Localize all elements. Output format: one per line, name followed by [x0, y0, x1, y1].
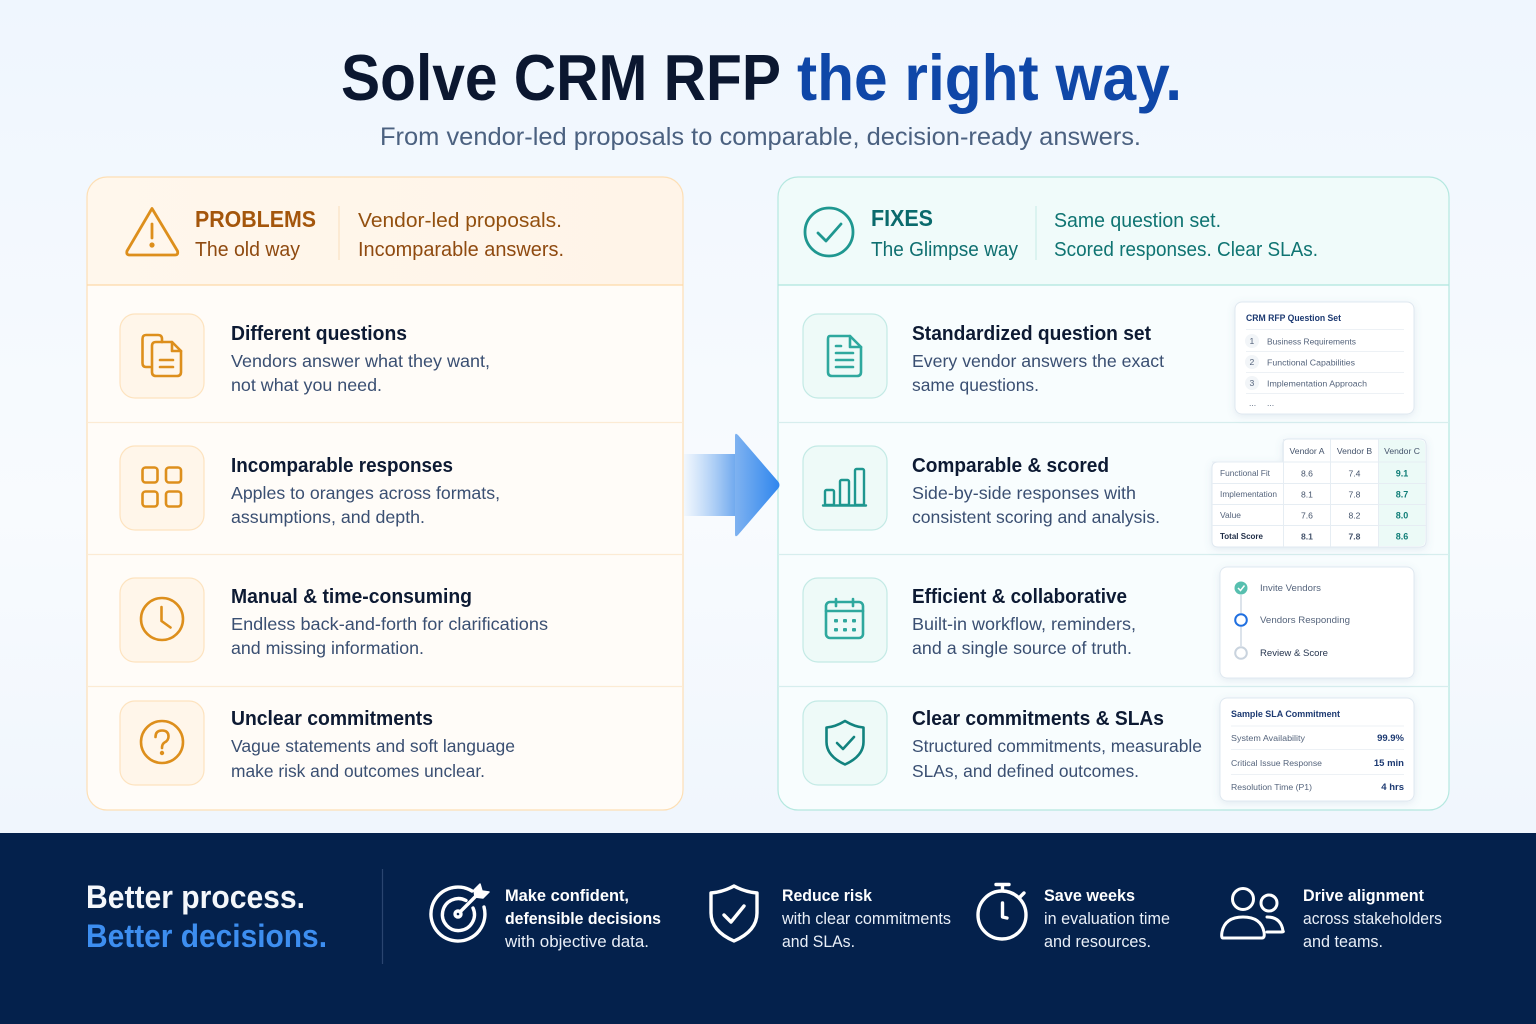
benefit: reduce risk: with clear commitments	[781, 909, 951, 928]
card: SLA commitment	[1220, 698, 1414, 801]
row: efficient and collaborative	[803, 578, 1136, 662]
fixes summary: Scored responses. Clear SLAs.	[1054, 238, 1318, 261]
card: workflow status	[1220, 567, 1414, 678]
benefit: save weeks: and resources.	[1044, 932, 1151, 951]
row: comparable and scored: Side-by-side responses with	[912, 483, 1136, 503]
card: vendor score table: 8.0	[1396, 510, 1408, 520]
card: question set: CRM RFP Question Set	[1246, 313, 1341, 323]
subtitle: From vendor-led proposals to comparable, decision-ready answers.	[380, 123, 1141, 151]
card: vendor score table: Functional Fit	[1220, 468, 1271, 478]
card: SLA commitment: Sample SLA Commitment	[1231, 709, 1340, 719]
card: vendor score table: Implementation	[1220, 489, 1277, 499]
problems summary	[358, 209, 564, 261]
row: incomparable responses: Apples to oranges across formats,	[231, 483, 500, 503]
card: vendor score table: Total Score	[1220, 531, 1263, 541]
card: question set: Business Requirements	[1267, 336, 1356, 346]
card: question set: Implementation Approach	[1267, 378, 1367, 388]
row: different questions: Different questions	[231, 323, 407, 345]
row: different questions	[120, 314, 490, 398]
card: SLA commitment: 15 min	[1374, 758, 1404, 769]
benefit: save weeks: Save weeks	[1044, 886, 1135, 905]
row: comparable and scored	[803, 446, 1160, 530]
benefit: drive alignment: and teams.	[1303, 932, 1383, 951]
problems label: The old way	[195, 239, 300, 261]
card: vendor score table: 8.6	[1301, 468, 1313, 478]
card: vendor score table: 8.1	[1301, 490, 1313, 500]
icon: calendar	[803, 578, 887, 662]
row: manual and time-consuming: Endless back-and-forth for clarifications	[231, 614, 548, 634]
card: vendor score table: Value	[1220, 510, 1241, 520]
footer band	[0, 833, 1536, 1024]
problems summary: Vendor-led proposals.	[358, 209, 562, 232]
card: SLA commitment: 4 hrs	[1381, 782, 1404, 793]
row: manual and time-consuming: Manual & time-consuming	[231, 586, 472, 608]
problems label: PROBLEMS	[195, 206, 316, 232]
row: different questions: Vendors answer what they want,	[231, 351, 490, 371]
card: vendor score table: Vendor A	[1290, 446, 1325, 456]
icon: warning triangle	[127, 208, 178, 255]
icon: shield check	[803, 701, 887, 785]
row: clear commitments and SLAs	[803, 701, 1202, 785]
card: SLA commitment: System Availability	[1231, 733, 1306, 743]
panel: problems	[87, 177, 683, 810]
card: vendor score table: 8.7	[1396, 490, 1408, 500]
row: manual and time-consuming: and missing information.	[231, 638, 424, 658]
card: vendor score table: 9.1	[1396, 468, 1408, 478]
footer headline: Better decisions.	[86, 918, 327, 954]
card: SLA commitment: Resolution Time (P1)	[1231, 782, 1312, 792]
row: unclear commitments: Vague statements and soft language	[231, 736, 515, 756]
icon: target	[431, 884, 489, 941]
card: vendor score table: 7.6	[1301, 510, 1313, 520]
card: vendor score table	[1212, 439, 1426, 547]
card: vendor score table: 8.6	[1396, 532, 1408, 542]
benefit: drive alignment	[1222, 886, 1442, 951]
row: standardized question set: Standardized question set	[912, 323, 1151, 345]
row: efficient and collaborative: and a single source of truth.	[912, 638, 1132, 658]
card: workflow status: Invite Vendors	[1260, 583, 1321, 594]
row: comparable and scored: consistent scoring and analysis.	[912, 507, 1160, 527]
fixes label	[871, 205, 1018, 261]
fixes summary: Same question set.	[1054, 209, 1221, 232]
icon: shield	[711, 886, 757, 941]
row: standardized question set: same questions.	[912, 375, 1039, 395]
icon: document	[803, 314, 887, 398]
card: SLA commitment: 99.9%	[1377, 733, 1405, 744]
row: incomparable responses	[120, 446, 500, 530]
row: clear commitments and SLAs: Structured commitments, measurable	[912, 736, 1202, 756]
problems summary: Incomparable answers.	[358, 238, 564, 261]
benefit: reduce risk: Reduce risk	[782, 886, 872, 905]
panel: fixes	[778, 177, 1449, 810]
footer headline	[86, 879, 327, 954]
card: workflow status: Vendors Responding	[1260, 615, 1350, 626]
fixes label: FIXES	[871, 205, 933, 231]
benefit: confident decisions	[431, 884, 661, 951]
row: efficient and collaborative: Built-in workflow, reminders,	[912, 614, 1136, 634]
row: manual and time-consuming	[120, 578, 548, 662]
card: question set	[1235, 302, 1414, 414]
arrow	[684, 434, 780, 536]
row: efficient and collaborative: Efficient & collaborative	[912, 586, 1127, 608]
icon: clock	[120, 578, 204, 662]
row: unclear commitments: make risk and outcomes unclear.	[231, 761, 485, 781]
title: Solve CRM RFP	[341, 41, 781, 114]
card: vendor score table: 8.1	[1301, 532, 1313, 542]
row: incomparable responses: Incomparable responses	[231, 455, 453, 477]
fixes summary	[1054, 209, 1318, 261]
row: unclear commitments	[120, 701, 515, 785]
benefit: reduce risk	[711, 886, 951, 951]
row: unclear commitments: Unclear commitments	[231, 708, 433, 730]
benefit: reduce risk: and SLAs.	[782, 932, 855, 951]
card: question set: ...	[1249, 398, 1256, 408]
icon: question mark	[120, 701, 204, 785]
benefit: save weeks: in evaluation time	[1044, 909, 1170, 928]
card: vendor score table: 7.8	[1349, 490, 1361, 500]
card: vendor score table: Vendor B	[1337, 446, 1372, 456]
card: question set: ...	[1267, 398, 1274, 408]
benefit: confident decisions: with objective data.	[504, 932, 649, 951]
benefit: drive alignment: Drive alignment	[1303, 886, 1424, 905]
icon: four squares	[120, 446, 204, 530]
card: vendor score table: Vendor C	[1384, 446, 1420, 456]
card: SLA commitment: Critical Issue Response	[1231, 758, 1322, 768]
card: workflow status: Review & Score	[1260, 648, 1328, 659]
icon: documents	[120, 314, 204, 398]
card: question set: Functional Capabilities	[1267, 358, 1355, 368]
row: standardized question set	[803, 314, 1164, 398]
card: vendor score table: 8.2	[1349, 510, 1361, 520]
card: vendor score table: 7.8	[1349, 532, 1361, 542]
benefit: confident decisions: Make confident,	[505, 886, 629, 905]
benefit: confident decisions: defensible decisions	[505, 909, 661, 928]
row: clear commitments and SLAs: Clear commitments & SLAs	[912, 708, 1164, 730]
card: question set: 1	[1250, 336, 1254, 346]
footer headline: Better process.	[86, 879, 305, 915]
benefit: save weeks	[978, 884, 1170, 951]
row: standardized question set: Every vendor answers the exact	[912, 351, 1164, 371]
row: incomparable responses: assumptions, and depth.	[231, 507, 425, 527]
problems label	[195, 206, 316, 261]
row: clear commitments and SLAs: SLAs, and defined outcomes.	[912, 761, 1139, 781]
row: comparable and scored: Comparable & scored	[912, 455, 1109, 477]
row: different questions: not what you need.	[231, 375, 382, 395]
icon: stopwatch	[978, 884, 1026, 939]
card: question set: 3	[1250, 378, 1254, 388]
title	[341, 41, 1182, 114]
fixes label: The Glimpse way	[871, 239, 1018, 261]
card: question set: 2	[1250, 357, 1254, 367]
benefit: drive alignment: across stakeholders	[1303, 909, 1442, 928]
title: the right way.	[797, 41, 1182, 114]
card: vendor score table: 7.4	[1349, 468, 1361, 478]
icon: people	[1222, 888, 1283, 938]
icon: bar chart	[803, 446, 887, 530]
icon: check circle	[805, 208, 853, 256]
